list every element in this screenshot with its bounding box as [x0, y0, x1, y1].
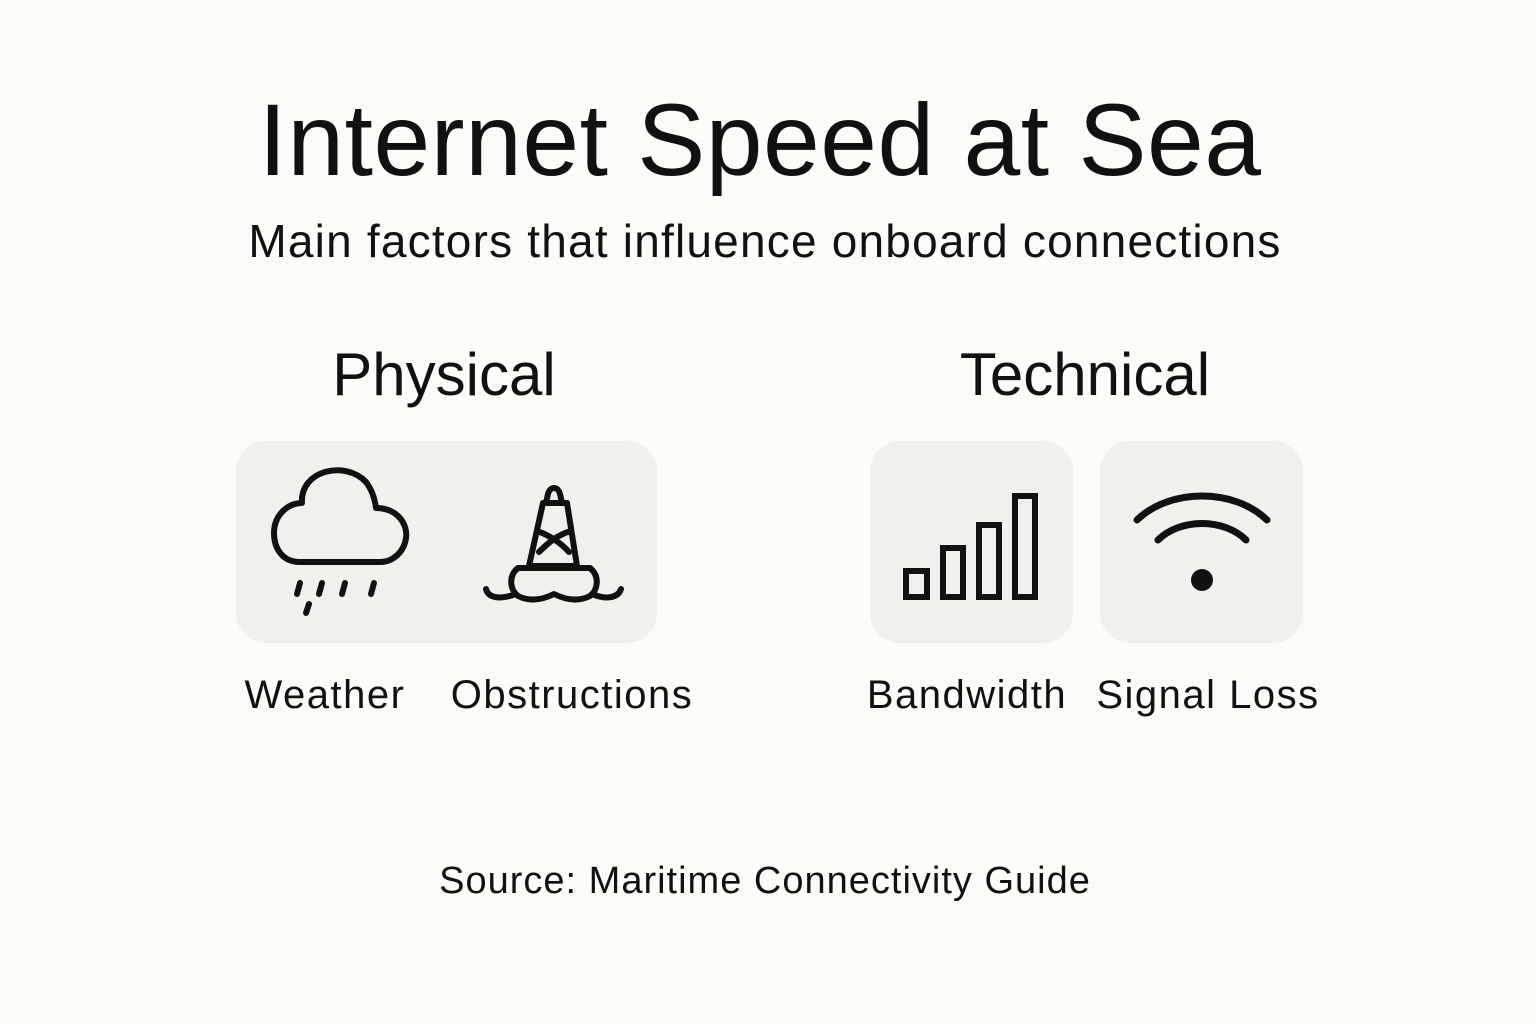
source: Source: Maritime Connectivity Guide	[439, 860, 1091, 902]
icon: wifi	[1134, 492, 1270, 591]
icon: signal bars	[903, 493, 1038, 600]
label: Signal Loss: Signal Loss	[1096, 673, 1320, 717]
icon: cloud rain	[274, 470, 406, 613]
heading: Physical: Physical	[332, 341, 556, 408]
label: Obstructions: Obstructions	[451, 673, 693, 717]
heading: Technical: Technical	[960, 341, 1210, 408]
icon: buoy	[486, 488, 621, 600]
label: Bandwidth: Bandwidth	[867, 673, 1067, 717]
title: Internet Speed at Sea	[259, 83, 1261, 197]
panel: bandwidth	[870, 441, 1073, 643]
subtitle: Main factors that influence onboard connections	[248, 215, 1282, 267]
panel: signal loss	[1100, 441, 1303, 643]
panel: physical	[236, 441, 657, 643]
label: Weather: Weather	[245, 673, 405, 717]
